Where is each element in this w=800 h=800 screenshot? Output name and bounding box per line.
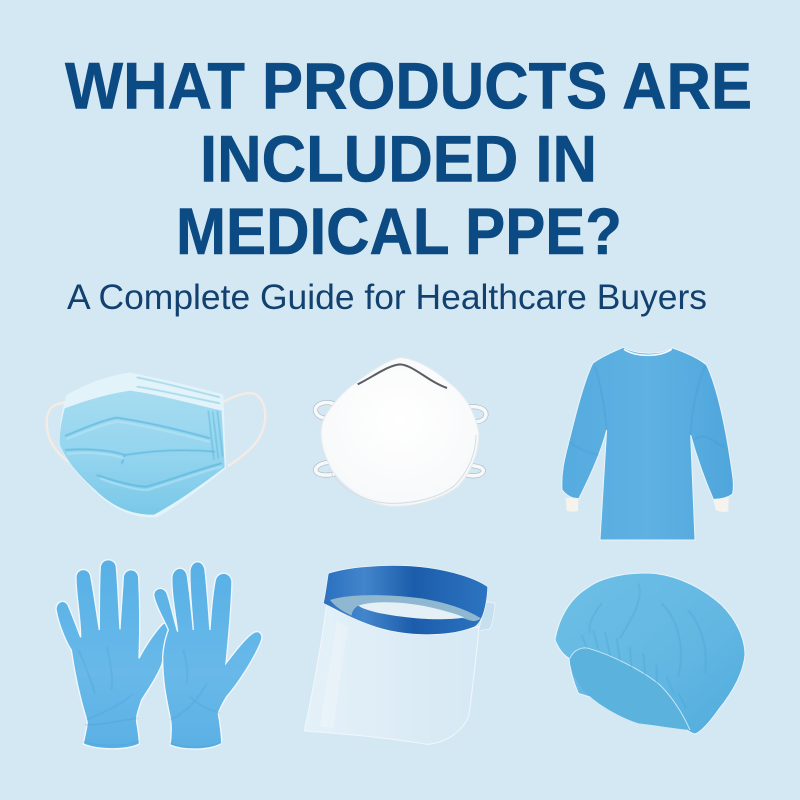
nose strip [358,364,447,388]
collar [624,349,672,355]
left glove [56,560,170,749]
visor highlight [320,622,348,728]
cap crown [555,573,745,734]
icon: surgical face mask [47,373,265,517]
glove folds [78,647,222,747]
blue headband [323,566,488,635]
icon: bouffant cap [555,573,745,734]
gown body [562,347,733,540]
mask body [60,373,226,517]
mask blue panel [60,391,225,515]
right cuff [713,497,729,512]
subtitle: A Complete Guide for Healthcare Buyers [67,278,707,317]
left cuff [566,498,578,512]
side strap [478,602,495,631]
title: INCLUDED IN [200,122,597,196]
icon: N95 respirator [315,357,486,506]
clear visor [304,605,479,744]
cup edge [328,435,476,503]
gown seams [569,366,725,455]
icon: nitrile gloves [56,560,262,749]
icon: isolation gown [562,347,733,540]
title: MEDICAL PPE? [176,194,622,268]
icon: face shield [304,566,495,744]
title [65,48,752,268]
right glove [154,562,262,749]
ear loops [47,393,265,466]
title: WHAT PRODUCTS ARE [65,48,752,122]
elastic edge [570,648,690,730]
headband inner [330,595,481,621]
respirator straps [315,403,486,476]
respirator cup [321,357,479,506]
head opening [358,602,464,619]
pleats [65,377,223,490]
gathers and creases [582,583,706,708]
cap underside [570,648,690,730]
